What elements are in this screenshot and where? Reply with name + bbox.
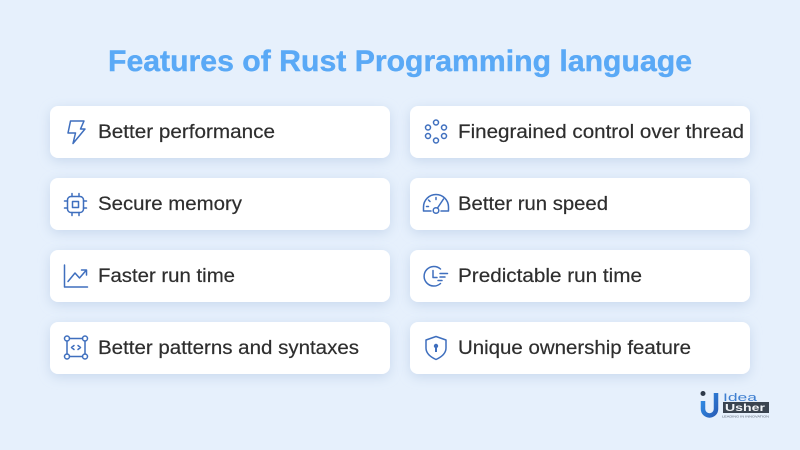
panel: unique ownership feature [410, 322, 750, 374]
icon: shield keyhole [426, 336, 446, 360]
panel: finegrained control over thread [410, 106, 750, 158]
logo: Idea Usher: Usher [725, 403, 765, 414]
label: predictable run time: Predictable run time [458, 266, 642, 287]
icon: lightning bolt [68, 121, 85, 144]
logo: Idea Usher [700, 391, 769, 418]
icon: speed gauge [424, 194, 448, 213]
title: Features of Rust Programming language [108, 45, 692, 78]
label: better patterns and syntaxes: Better patterns and syntaxes [98, 338, 359, 359]
icon: circle of dots [426, 120, 446, 143]
panel: secure memory [50, 178, 390, 230]
icon: fast clock [424, 266, 448, 286]
label: finegrained control over thread: Finegrained control over thread [458, 122, 744, 143]
icon: line chart [64, 265, 88, 287]
panel: better performance [50, 106, 390, 158]
panel: faster run time [50, 250, 390, 302]
label: better run speed: Better run speed [458, 194, 608, 215]
icon: code frame [64, 336, 88, 359]
icon: chip [64, 194, 86, 216]
label: faster run time: Faster run time [98, 266, 235, 287]
logo: Idea Usher: Idea [723, 392, 758, 404]
panel: predictable run time [410, 250, 750, 302]
panel: better run speed [410, 178, 750, 230]
logo: Idea Usher: LEADING IN INNOVATION [722, 414, 769, 418]
panel: better patterns and syntaxes [50, 322, 390, 374]
label: better performance: Better performance [98, 122, 275, 143]
label: unique ownership feature: Unique ownership feature [458, 338, 691, 359]
label: secure memory: Secure memory [98, 194, 243, 215]
